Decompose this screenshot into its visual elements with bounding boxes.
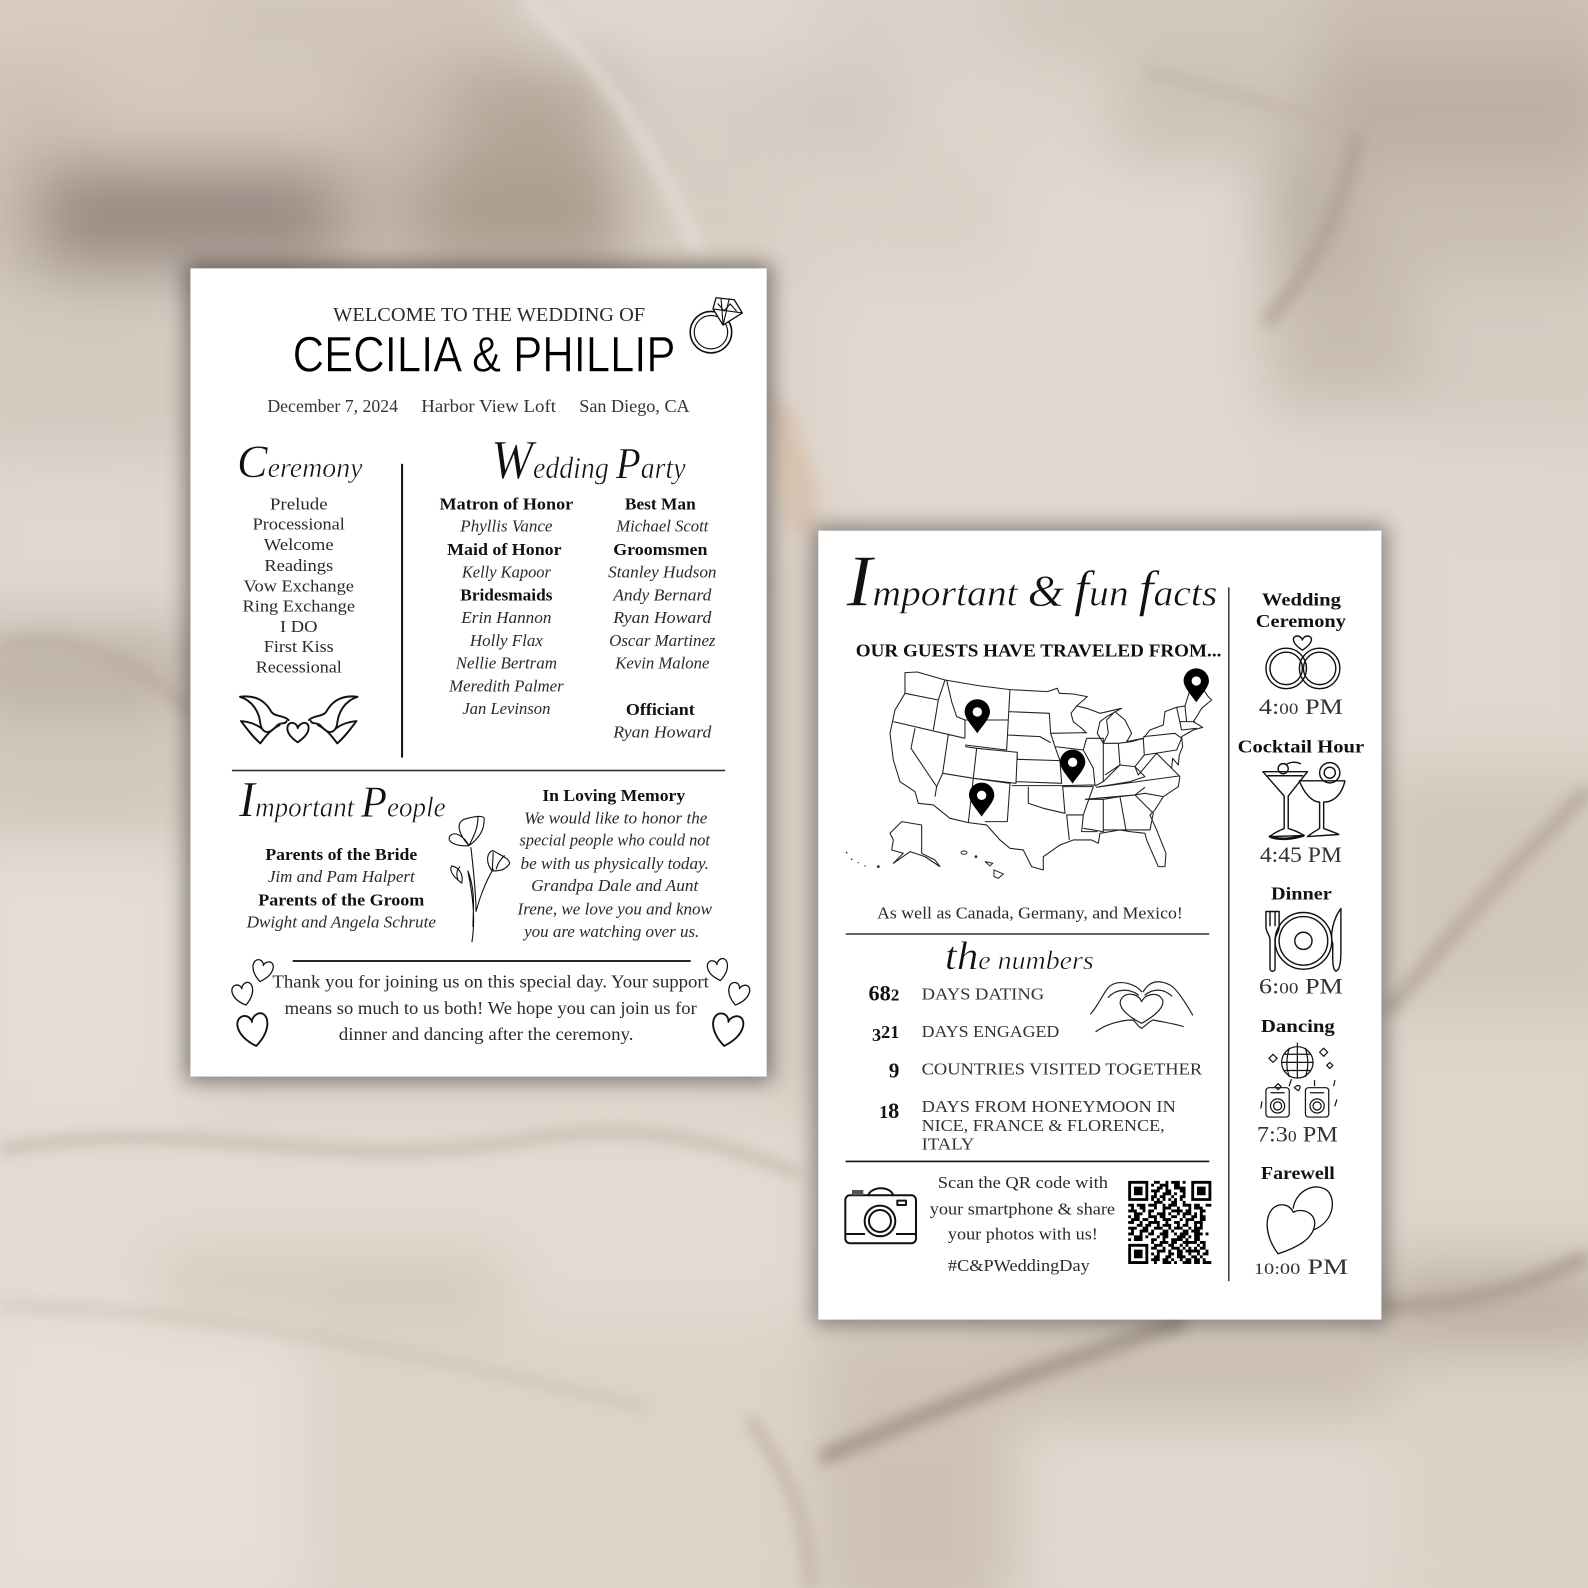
schedule: dinner [1259,883,1343,999]
ceremony order list: First Kiss [264,637,334,656]
schedule: cocktail hour [1238,736,1364,867]
qr instructions: your smartphone & share [930,1199,1115,1218]
parents list: Dwight and Angela Schrute [246,913,437,932]
wedding party: left column: Erin Hannon [460,608,551,627]
event details [267,396,690,416]
divider [846,933,1209,935]
wedding party: left column: Matron of Honor [440,494,574,513]
time: 4:00 PM: 4:00 PM [1259,694,1343,719]
icon: line-art flower [449,816,509,942]
schedule: dinner: Dinner [1271,883,1332,903]
divider [846,1161,1209,1162]
panel: programme card shadow [185,263,772,1082]
icon: two doves with heart [240,696,358,743]
ceremony order list: Readings [264,556,333,575]
wedding party: right column: Officiant [626,700,695,719]
icon: two hearts [1267,1187,1332,1254]
schedule: dancing [1257,1016,1338,1146]
thank you message [272,971,709,1044]
pin: New Mexico [969,783,994,817]
parents list: Jim and Pam Halpert [268,867,415,886]
in loving memory note: special people who could not [520,831,710,850]
in loving memory note: be with us physically today. [521,854,709,873]
parents list: Parents of the Groom [258,890,424,909]
in loving memory note: Grandpa Dale and Aunt [531,876,699,895]
event details: San Diego, CA [579,396,690,416]
numbers: figures [868,981,899,1123]
icons: right hearts [706,958,751,1049]
wedding party: right column: Stanley Hudson [608,562,717,581]
map: hawaii [961,851,1003,878]
wedding party: left column: Holly Flax [469,631,543,650]
numbers: labels: NICE, FRANCE & FLORENCE, [922,1116,1165,1135]
chart: US map with pins [846,668,1212,878]
in loving memory note: We would like to honor the [524,808,708,827]
time: 4:45 PM: 4:45 PM [1260,842,1342,867]
qr instructions: your photos with us! [948,1225,1098,1244]
qr instructions: Scan the QR code with [938,1173,1109,1192]
schedule: wedding ceremony: Ceremony [1256,611,1346,631]
qr instructions [930,1173,1115,1275]
wedding party: right column: Ryan Howard [612,608,712,627]
icon: disco ball and speakers [1261,1043,1337,1117]
schedule: farewell: Farewell [1261,1163,1335,1183]
ceremony order list: Recessional [256,657,342,676]
numbers: figures: 3 [872,1025,881,1045]
wedding party: right column: Best Man [625,494,696,513]
pin: Missouri [1060,750,1085,784]
pin: Maine [1184,668,1209,702]
icons: left hearts [231,959,274,1049]
schedule: farewell [1254,1163,1348,1279]
numbers: labels: DAYS ENGAGED [922,1022,1059,1041]
schedule: cocktail hour: Cocktail Hour [1238,736,1364,756]
numbers: labels: ITALY [922,1134,974,1153]
icon: camera [845,1188,916,1243]
heading: guests travelled: OUR GUESTS HAVE TRAVELED FROM... [856,640,1221,660]
icon: linked rings [1266,636,1340,689]
panel: wedding programme card [190,268,767,1077]
QR code [1128,1182,1211,1263]
numbers: figures: 682 [868,981,899,1006]
in loving memory note: In Loving Memory [542,786,686,805]
thank you message: Thank you for joining us on this special day. Your support [272,971,709,991]
numbers: figures: 9 [889,1059,899,1083]
wedding party: left column: Bridesmaids [460,586,553,605]
time: 6:00 PM: 6:00 PM [1259,974,1343,999]
pin: Wyoming [965,699,990,733]
wedding party: left column [440,494,574,718]
wedding party: right column: Kevin Malone [614,653,710,672]
map: islands [846,852,977,868]
heading: important and fun facts: Important & fun facts [846,541,1217,622]
heading: important people: Important People [238,771,446,827]
heading: welcome line: WELCOME TO THE WEDDING OF [333,304,645,326]
ceremony order list: Vow Exchange [244,576,354,595]
divider: horizontal rule [232,770,725,771]
wedding party: right column: Groomsmen [613,540,708,559]
icon: cocktail glasses [1263,762,1345,839]
wedding party: right column: Andy Bernard [612,586,712,605]
ceremony order list: Processional [253,515,345,534]
divider: lower rule [293,960,691,962]
wedding party: left column: Maid of Honor [447,540,562,559]
title: couple names: CECILIA & PHILLIP [293,327,676,383]
wedding party: right column [608,494,717,741]
wedding party: left column: Jan Levinson [462,699,550,718]
ceremony order list: Ring Exchange [243,597,355,616]
time: 10:00 PM: 10:00 PM [1254,1254,1348,1279]
ceremony order list: Welcome [264,535,334,554]
numbers: labels: DAYS FROM HONEYMOON IN [922,1097,1176,1116]
numbers: labels [922,985,1203,1153]
event details: December 7, 2024 [267,396,398,416]
parents list [246,845,437,932]
ceremony order list [243,494,355,676]
divider: schedule column rule [1228,587,1230,1281]
divider: column rule [401,464,403,758]
thank you message: dinner and dancing after the ceremony. [339,1024,633,1044]
icon: hands forming heart [1091,982,1193,1032]
panel: facts card shadow [813,526,1386,1325]
panel: important and fun facts card [818,531,1381,1320]
heading: ceremony: Ceremony [237,436,363,488]
wedding party: left column: Nellie Bertram [455,653,557,672]
wedding party: left column: Phyllis Vance [459,517,553,536]
numbers: labels: DAYS DATING [922,985,1044,1004]
wedding party: left column: Meredith Palmer [448,677,564,696]
ceremony order list: I DO [280,617,317,636]
numbers: figures: 18 [879,1098,899,1123]
wedding party: right column: Ryan Howard [612,722,712,741]
schedule: wedding ceremony [1256,590,1346,719]
parents list: Parents of the Bride [265,845,417,864]
event details: Harbor View Loft [421,396,556,416]
icon: diamond ring [690,298,742,353]
schedule: dancing: Dancing [1261,1016,1335,1036]
map: state outlines [890,672,1212,870]
time: 7:30 PM: 7:30 PM [1257,1121,1338,1146]
heading: wedding party: Wedding Party [491,429,686,490]
map caption: As well as Canada, Germany, and Mexico! [877,904,1183,923]
thank you message: means so much to us both! We hope you can join us for [285,998,697,1018]
wedding party: right column: Michael Scott [615,517,709,536]
heading: the numbers: the numbers [945,933,1094,978]
icon: plate, fork and knife [1266,908,1341,971]
ceremony order list: Prelude [270,494,328,513]
wedding party: right column: Oscar Martinez [609,631,716,650]
in loving memory note: Irene, we love you and know [516,900,713,919]
wedding party: left column: Kelly Kapoor [461,562,551,581]
qr instructions: #C&PWeddingDay [948,1256,1090,1275]
numbers: labels: COUNTRIES VISITED TOGETHER [922,1060,1203,1079]
numbers: figures: 21 [881,1022,899,1042]
in loving memory note [516,786,713,941]
schedule: wedding ceremony: Wedding [1262,590,1341,610]
in loving memory note: you are watching over us. [522,922,699,941]
